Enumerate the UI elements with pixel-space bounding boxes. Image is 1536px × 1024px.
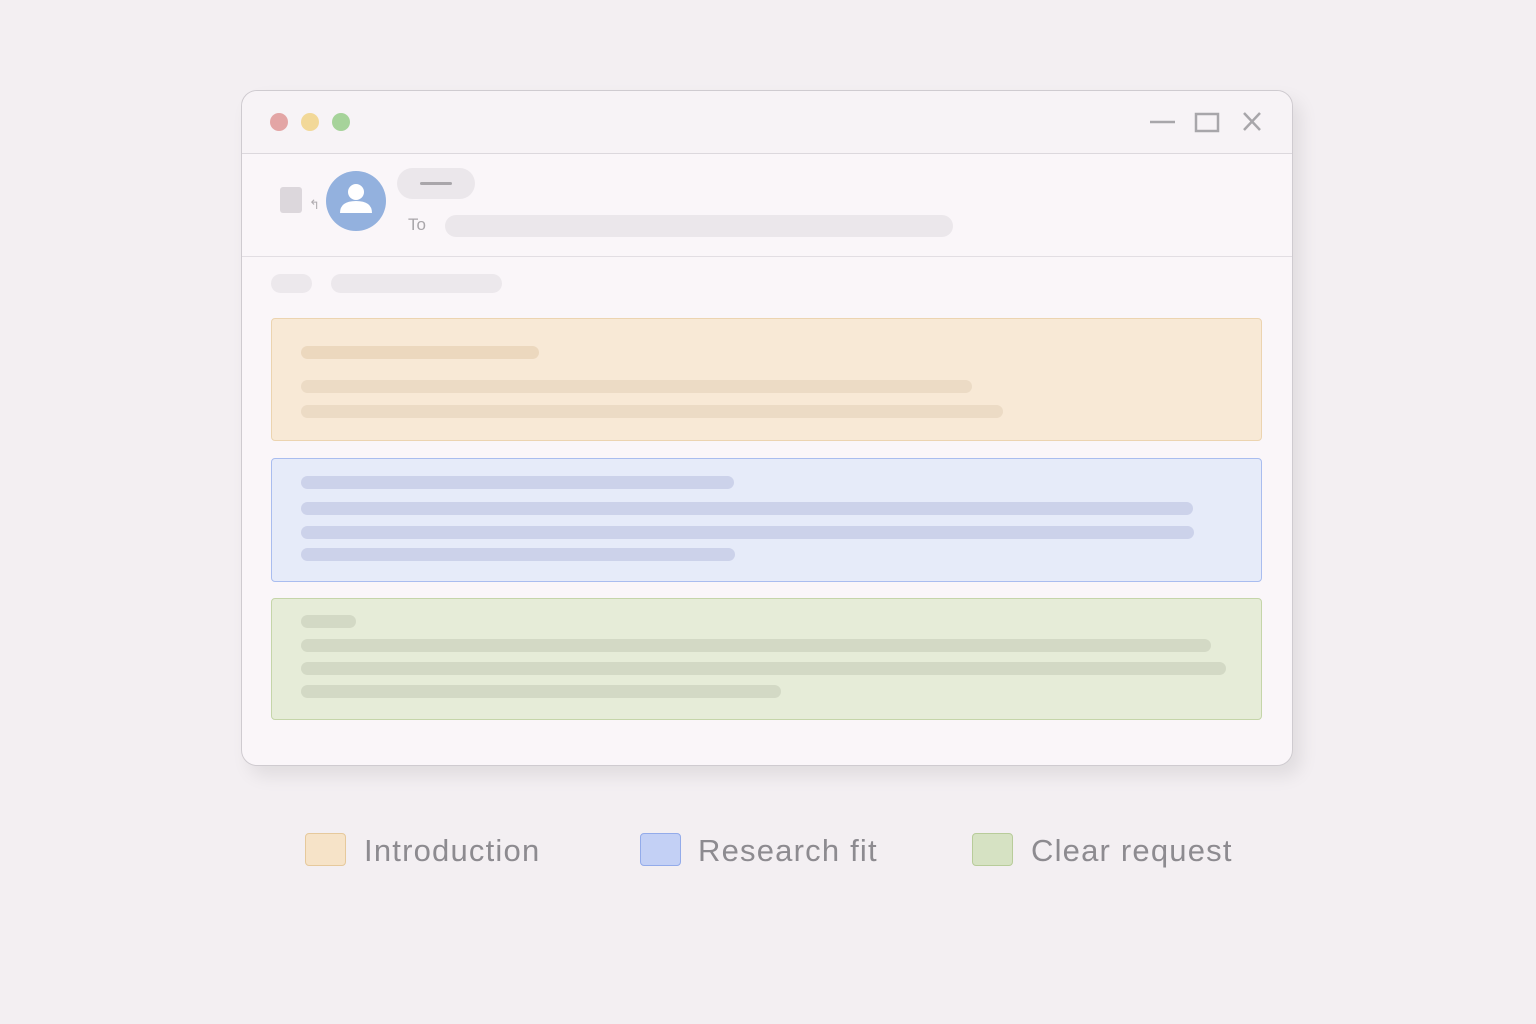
window controls (1150, 112, 1261, 132)
subject placeholders (271, 274, 312, 293)
email window (241, 90, 1293, 766)
icon: avatar (326, 171, 386, 231)
header: sender (242, 153, 1292, 257)
header: sender: ↰ (309, 197, 320, 212)
legend (305, 833, 1233, 868)
legend: clear request: Clear request (1031, 833, 1233, 868)
panel: clear request (271, 598, 1262, 720)
window dots (270, 113, 350, 131)
legend: research fit: Research fit (698, 833, 878, 868)
icon: trash (280, 187, 302, 213)
To field: To (408, 215, 426, 234)
panel: research fit (271, 458, 1262, 582)
legend: introduction: Introduction (364, 833, 540, 868)
panel: introduction (271, 318, 1262, 441)
from pill (397, 168, 475, 199)
title bar (242, 91, 1292, 154)
